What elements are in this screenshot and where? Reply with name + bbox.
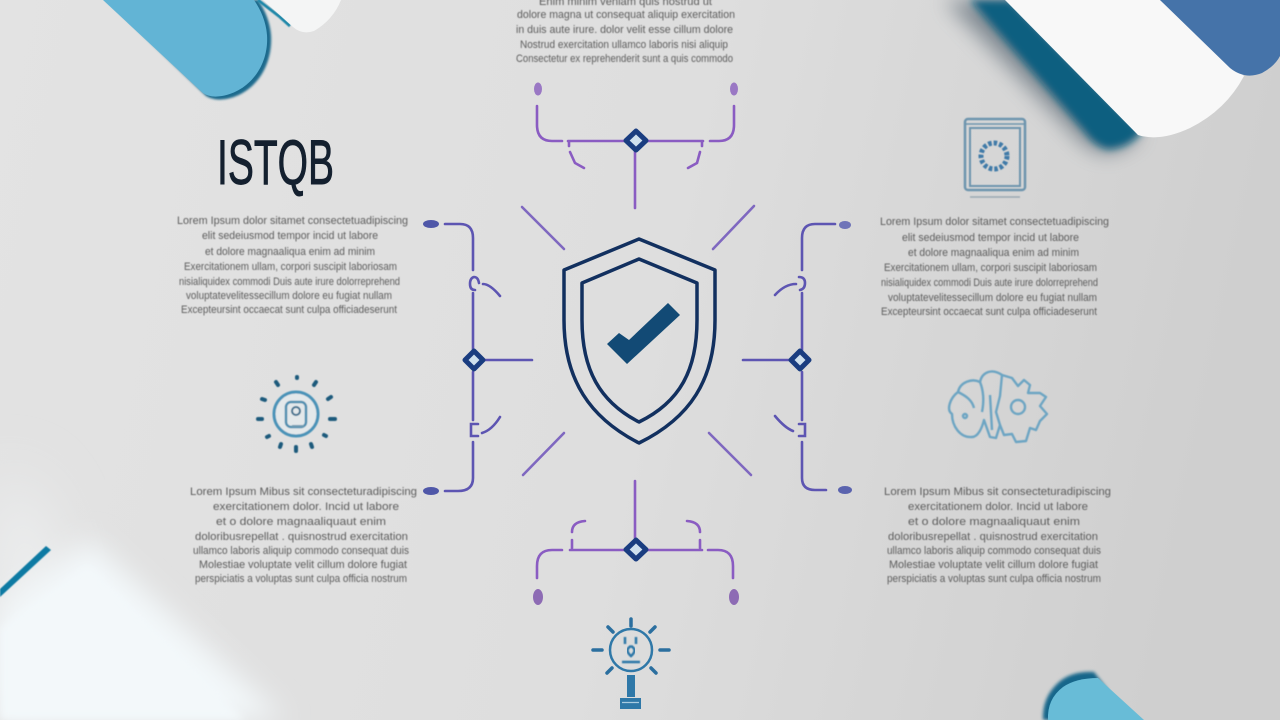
text block: top left: Excepteursint occaecat sunt culpa officiadeserunt <box>181 304 397 316</box>
decoration: top-right stripes <box>945 0 1280 153</box>
text block: bottom left: doloribusrepellat . quisnostrud exercitation <box>195 531 408 543</box>
text block: top center: Nostrud exercitation ullamco laboris nisi aliquip <box>520 39 728 51</box>
text block: top right: voluptatevelitessecillum dolore eu fugiat nullam <box>888 292 1097 304</box>
text block: top left: Lorem Ipsum dolor sitamet consectetuadipiscing <box>177 215 408 227</box>
text block: top right <box>880 216 1109 318</box>
connector: top <box>534 82 738 208</box>
decoration: bottom-right pill <box>1043 672 1144 720</box>
text block: top right: Lorem Ipsum dolor sitamet consectetuadipiscing <box>880 216 1109 228</box>
decoration: top-left blue pill <box>103 0 341 100</box>
text block: bottom right: Molestiae voluptate velit cillum dolore fugiat <box>889 559 1098 571</box>
text block: bottom left: et o dolore magnaaliquaut enim <box>216 516 386 528</box>
text block: bottom right: doloribusrepellat . quisnostrud exercitation <box>888 531 1098 543</box>
connector: bottom <box>533 481 739 605</box>
text block: top right: elit sedeiusmod tempor incid ut labore <box>902 232 1079 244</box>
text block: bottom left: exercitationem dolor. Incid ut labore <box>213 501 399 513</box>
text block: bottom right: et o dolore magnaaliquaut enim <box>908 516 1080 528</box>
connector: right <box>743 221 852 494</box>
text block: bottom left: Molestiae voluptate velit cillum dolore fugiat <box>199 559 407 571</box>
text block: top left: voluptatevelitessecillum dolore eu fugiat nullam <box>186 290 392 302</box>
text block: top right: Excepteursint occaecat sunt culpa officiadeserunt <box>881 306 1097 318</box>
text block: bottom left: ullamco laboris aliquip commodo consequat duis <box>193 545 409 557</box>
text block: bottom right: exercitationem dolor. Incid ut labore <box>908 501 1088 513</box>
text block: top left: nisialiquidex commodi Duis aute irure dolorreprehend <box>179 276 400 288</box>
icon: light bulb on stand <box>593 619 669 709</box>
text block: top right: et dolore magnaaliqua enim ad minim <box>908 247 1079 259</box>
decoration: bottom-left white glow <box>0 530 272 720</box>
title: ISTQB <box>217 128 334 198</box>
text block: bottom right: ullamco laboris aliquip commodo consequat duis <box>887 545 1101 557</box>
text block: top left: elit sedeiusmod tempor incid ut labore <box>202 230 378 242</box>
text block: bottom left <box>190 486 417 585</box>
text block: bottom right <box>884 486 1111 585</box>
text block: top left: Exercitationem ullam, corpori suscipit laboriosam <box>184 261 397 273</box>
text block: top right: Exercitationem ullam, corpori suscipit laboriosam <box>884 262 1097 274</box>
icon: framed badge <box>965 119 1025 197</box>
text block: top right: nisialiquidex commodi Duis aute irure dolorreprehend <box>881 277 1098 289</box>
text block: top center: dolore magna ut consequat aliquip exercitation <box>517 9 735 21</box>
text block: bottom right: Lorem Ipsum Mibus sit consecteturadipiscing <box>884 486 1111 498</box>
text block: top center: in duis aute irure. dolor velit esse cillum dolore <box>516 24 733 36</box>
icon: brain and gear <box>949 371 1047 442</box>
text block: top left: et dolore magnaaliqua enim ad minim <box>205 246 375 258</box>
text block: top center: Consectetur ex reprehenderit sunt a quis commodo <box>516 53 733 65</box>
text block: bottom left: Lorem Ipsum Mibus sit consecteturadipiscing <box>190 486 417 498</box>
text block: top center <box>516 0 735 65</box>
connector: left <box>423 220 532 495</box>
decoration: bottom-left teal stick <box>0 546 51 597</box>
text block: bottom right: perspiciatis a voluptas sunt culpa officia nostrum <box>887 573 1101 585</box>
icon: sun badge <box>258 377 335 451</box>
text block: bottom left: perspiciatis a voluptas sunt culpa officia nostrum <box>195 573 407 585</box>
rays around shield <box>522 206 754 475</box>
icon: central shield with check <box>564 239 715 443</box>
text block: top left <box>177 215 408 316</box>
